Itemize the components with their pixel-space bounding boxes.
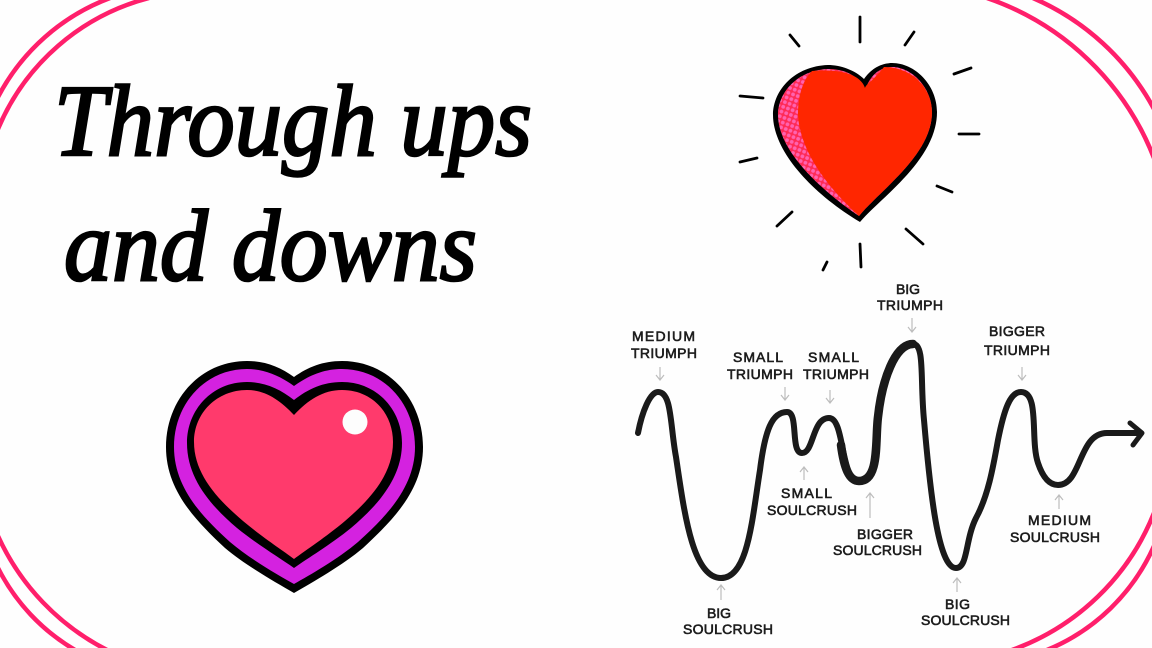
label: bigger triumph [984,323,1050,358]
label: medium soulcrush [1010,512,1100,545]
label: bigger soulcrush: BIGGER [857,526,913,542]
icon: red heart with rays [740,17,979,270]
label: small triumph second: SMALL [808,349,859,365]
purple band [174,369,415,584]
halftone shading [778,67,932,216]
label: bigger triumph: BIGGER [989,323,1045,339]
label: big soulcrush [683,605,773,637]
label: big triumph: TRIUMPH [877,297,943,313]
outer black outline [166,361,423,593]
title: and downs [64,190,477,303]
heart outline [773,63,937,222]
label: small triumph: SMALL [733,349,783,365]
highlight [342,410,368,434]
inner black outline [187,382,402,568]
gray pointer arrows [656,318,1063,600]
label: small soulcrush: SMALL [781,485,832,501]
label: small triumph second: TRIUMPH [803,366,869,382]
label: medium soulcrush: MEDIUM [1028,512,1091,528]
label: small soulcrush: SOULCRUSH [767,502,857,518]
arrowhead [1130,423,1142,445]
rays [740,17,979,270]
label: big triumph: BIG [896,281,920,297]
pink fill [194,390,393,559]
thicker stretches of the curve [841,344,913,481]
label: medium triumph: TRIUMPH [631,345,697,361]
label: bigger triumph: TRIUMPH [984,342,1050,358]
ups and downs chart [631,281,1142,637]
title [54,65,532,303]
label: big soulcrush second: BIG [945,596,970,612]
label: big soulcrush second [921,596,1010,628]
label: bigger soulcrush: SOULCRUSH [833,542,922,558]
label: small triumph [727,349,793,382]
title: Through ups [54,65,532,178]
journey curve [638,344,1141,578]
label: small triumph second [803,349,869,382]
label: bigger soulcrush [833,526,922,558]
red heart fill [798,67,932,216]
label: big triumph [877,281,943,313]
label: small triumph: TRIUMPH [727,366,793,382]
label: big soulcrush second: SOULCRUSH [921,612,1010,628]
label: big soulcrush: BIG [707,605,731,621]
label: small soulcrush [767,485,857,518]
label: medium triumph [631,328,697,361]
label: big soulcrush: SOULCRUSH [683,621,773,637]
label: medium soulcrush: SOULCRUSH [1010,529,1100,545]
label: medium triumph: MEDIUM [632,328,695,344]
icon: pink and purple heart [166,361,423,593]
